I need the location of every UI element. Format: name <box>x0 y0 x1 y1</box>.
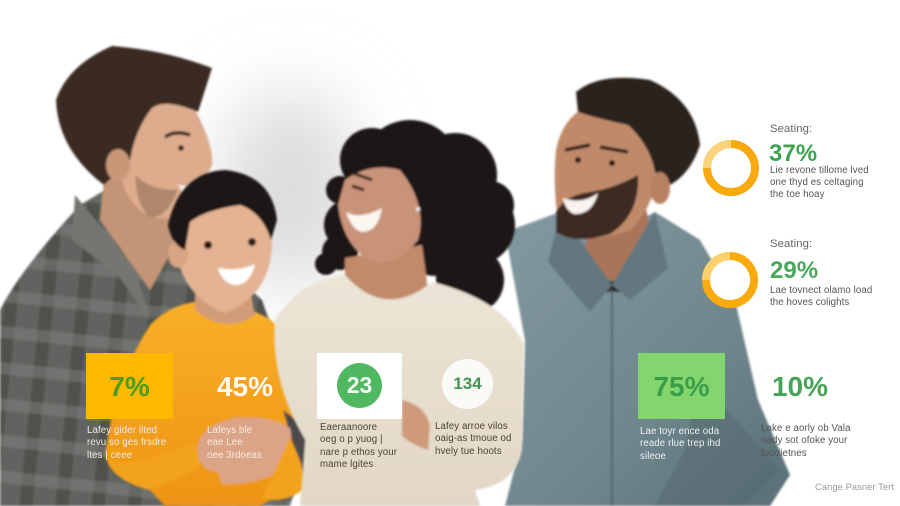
caption: 45%: eae Lee <box>207 437 243 448</box>
stat: 75%: 75% <box>653 371 710 402</box>
label: Seating 1: Seating: <box>770 123 812 135</box>
caption: 134 <box>435 421 511 457</box>
badge: 134 <box>442 359 493 409</box>
caption: 10%: foodietnes <box>761 448 807 459</box>
person: boy <box>105 170 310 506</box>
text: 37% description: the toe hoay <box>770 189 825 200</box>
stat: 37%: 37% <box>769 140 817 167</box>
stat: 29%: 29% <box>770 257 818 284</box>
text: 37% description: one thyd es celtaging <box>770 177 864 188</box>
caption: 7%: ltes | ceee <box>87 450 132 461</box>
person: woman <box>274 120 524 506</box>
caption: 134: Lafey arroe vilos <box>435 421 508 432</box>
caption: 23: oeg o p yuog | <box>320 434 383 445</box>
caption: 45%: oee 3rdoeas <box>207 450 262 461</box>
caption: 75% <box>640 426 721 462</box>
text: 29% description <box>770 285 872 308</box>
stat: 45%: 45% <box>217 371 273 402</box>
card: 75% <box>638 353 725 419</box>
caption: 10% <box>761 423 851 459</box>
caption: 7% <box>87 425 166 461</box>
caption: 23: nare p ethos your <box>320 447 397 458</box>
caption: 45% <box>207 425 262 461</box>
label: Seating 2: Seating: <box>770 238 812 250</box>
caption: 23 <box>320 422 397 470</box>
caption: 7%: Lafey gider lited <box>87 425 157 436</box>
wall shadow <box>220 90 360 290</box>
footer note: Cange Pasner Tert <box>815 482 894 492</box>
donut: 37% <box>703 140 759 196</box>
caption: 23: Eaeraanoore <box>320 422 377 433</box>
card: 23 <box>317 353 402 419</box>
caption: 10%: Lake e aorly ob Vala <box>761 423 851 434</box>
caption: 75%: reade rlue trep ihd <box>640 438 721 449</box>
caption: 134: oaig-as tmoue od <box>435 433 511 444</box>
text: 37% description <box>770 165 869 200</box>
caption: 7%: revu so ges frsdre <box>87 437 166 448</box>
badge: 23 <box>337 363 382 408</box>
donut: 29% <box>702 252 758 308</box>
caption: 75%: sileoe <box>640 451 666 462</box>
text: 29% description: the hoves colights <box>770 297 849 308</box>
text: 37% description: Lie revone tillome lved <box>770 165 869 176</box>
stat: 7%: 7% <box>109 371 150 402</box>
person: right man <box>505 78 790 506</box>
caption: 23: mame lgites <box>320 459 373 470</box>
caption: 75%: Lae toyr ence oda <box>640 426 719 437</box>
caption: 45%: Lafeys ble <box>207 425 252 436</box>
badge: 134: 134 <box>453 374 482 393</box>
text: 29% description: Lae tovnect olamo load <box>770 285 872 296</box>
caption: 10%: nady sot ofoke your <box>761 435 847 446</box>
dark gap: arm behind boy <box>283 410 310 490</box>
card: 7% <box>86 353 173 419</box>
person: left man <box>0 46 310 506</box>
clasped hands <box>197 417 291 484</box>
caption: 134: hvely tue hoots <box>435 446 502 457</box>
badge: 23: 23 <box>347 372 372 398</box>
stat: 10%: 10% <box>772 371 828 402</box>
